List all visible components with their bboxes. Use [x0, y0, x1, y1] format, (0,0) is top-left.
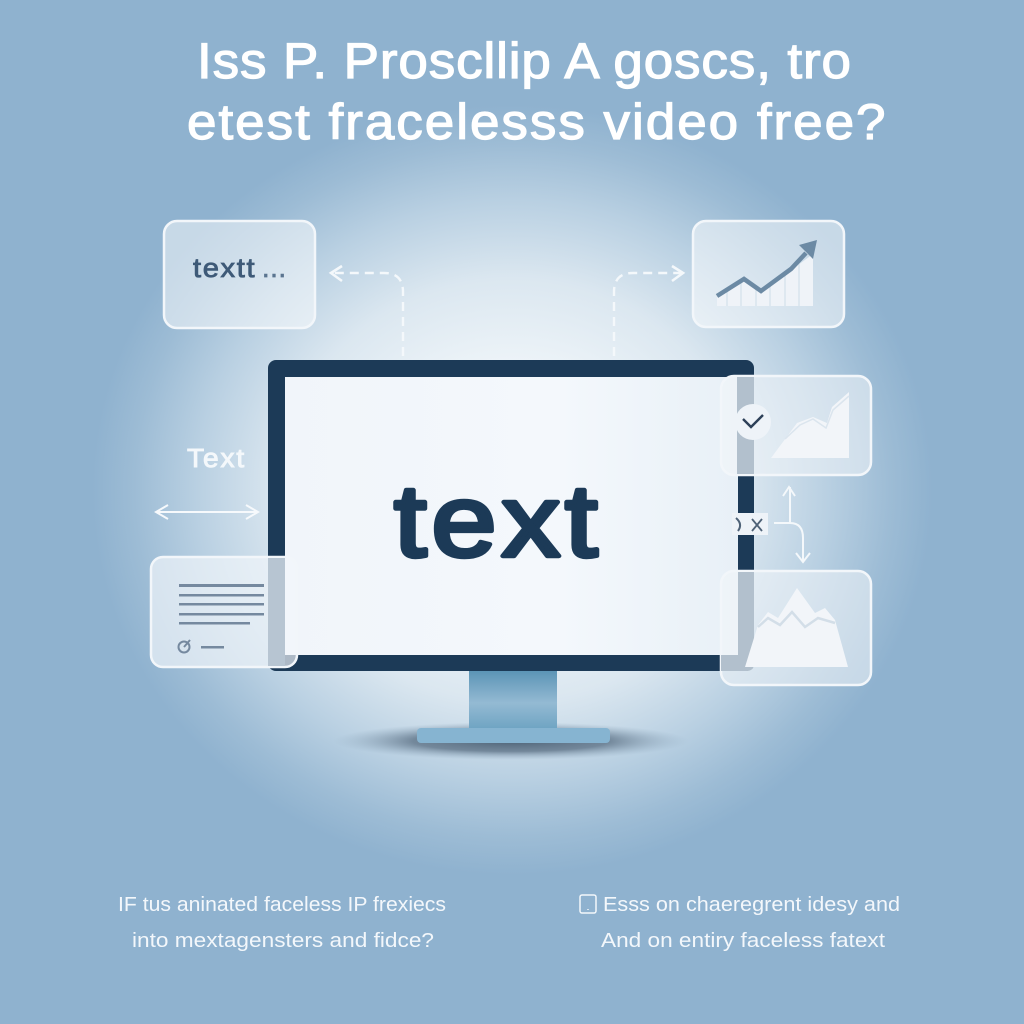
monitor stand shadow [333, 722, 689, 760]
area shape [771, 392, 849, 458]
monitor base [417, 728, 610, 743]
caption: left [118, 894, 446, 952]
caption: right: Esss on chaeregrent idesy and [603, 894, 900, 916]
caption: left: into mextagensters and fidce? [132, 930, 434, 952]
arrow: dashed to text card [331, 266, 403, 356]
arrow: double headed [156, 505, 258, 519]
card: text label: ... [262, 253, 286, 283]
title: etest fracelesss video free? [187, 93, 886, 150]
text lines [179, 584, 264, 648]
screen text: text [394, 465, 598, 578]
card: area chart with check [721, 376, 871, 475]
caption: right [601, 894, 900, 952]
bezel seen through card [268, 558, 285, 666]
monitor [268, 360, 754, 760]
small label: x tag [732, 513, 768, 535]
monitor neck [469, 670, 557, 730]
check badge [735, 404, 771, 440]
arrow: branching up and down [774, 487, 810, 562]
monitor screen [285, 377, 738, 655]
small target icon [178, 640, 190, 652]
card: document [151, 557, 297, 667]
arrow: dashed to chart card [614, 266, 683, 356]
card: text label: textt [193, 253, 255, 283]
bezel seen through card [721, 572, 754, 671]
title: Iss P. Proscllip A goscs, tro [197, 32, 851, 89]
card: text label [164, 221, 315, 328]
card: mountain [721, 571, 871, 685]
bars [717, 254, 813, 306]
bezel seen through card [737, 377, 754, 474]
caption: right: And on entiry faceless fatext [601, 930, 886, 952]
mountain shape [745, 588, 848, 667]
caption: left: IF tus aninated faceless IP frexiecs [118, 894, 446, 916]
card: growth chart [693, 221, 844, 327]
label: Text: Text [187, 444, 245, 473]
title [187, 32, 886, 150]
monitor bezel [268, 360, 754, 671]
trend arrow [717, 253, 806, 296]
icon: tablet [580, 895, 596, 913]
check mark [743, 415, 763, 427]
